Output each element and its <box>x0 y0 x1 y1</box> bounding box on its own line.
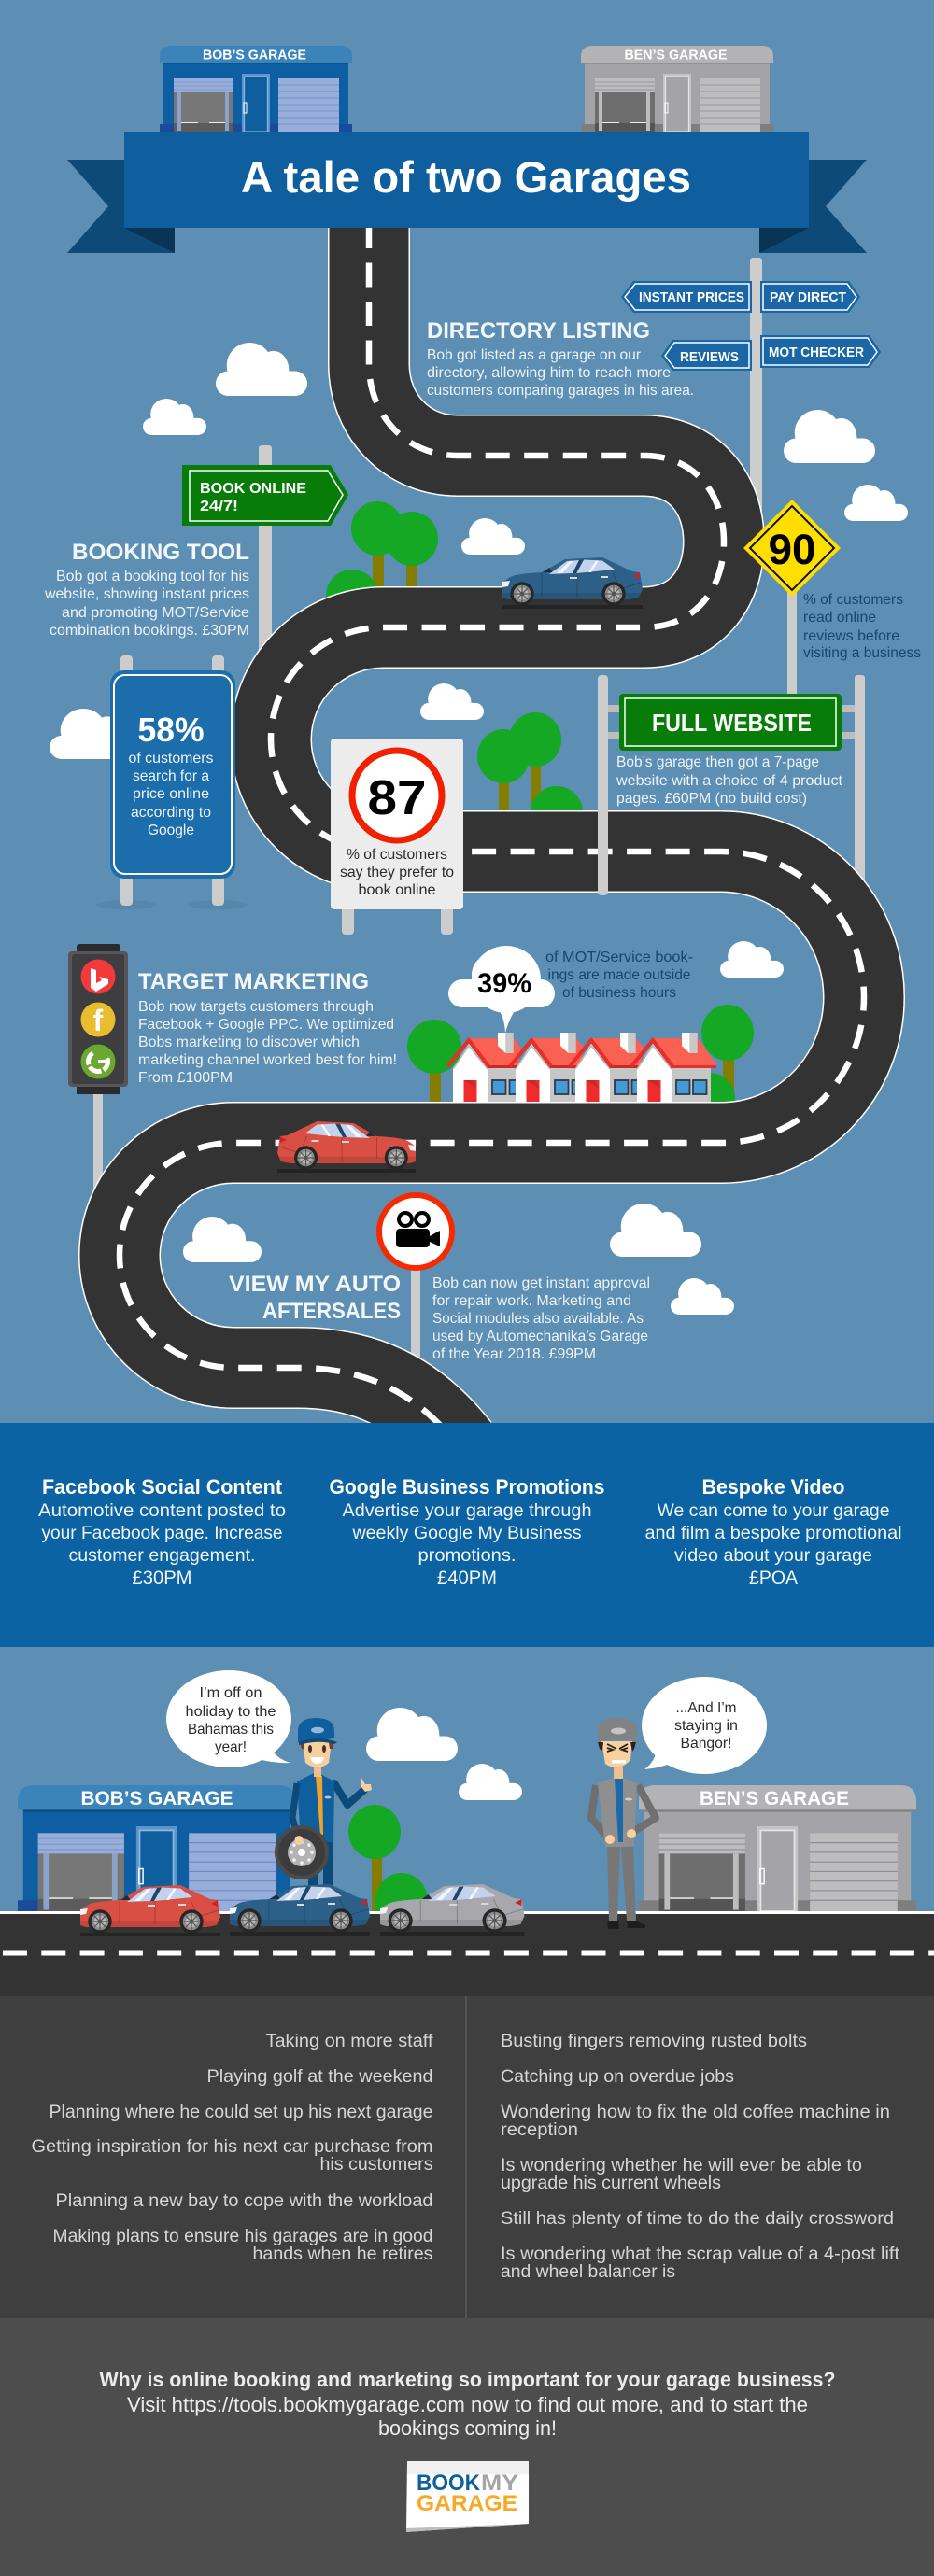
signs: instant prices, pay direct, reviews, MOT checker: REVIEWS <box>680 350 739 365</box>
speech bubble: Bob <box>166 1670 291 1767</box>
speech bubble: Bob: I’m off on <box>200 1685 262 1701</box>
text: reviews stat: reviews before <box>803 628 899 644</box>
speech bubble: Bob: year! <box>215 1739 247 1755</box>
character: Bob mechanic <box>275 1718 372 1890</box>
panel: Google business promotions <box>329 1475 605 1588</box>
text: view my auto aftersales: AFTERSALES <box>262 1299 401 1324</box>
icon: Bob's garage top: BOB’S GARAGE <box>203 49 306 63</box>
text: booking tool: combination bookings. £30PM <box>50 623 249 639</box>
icon: camera <box>396 1213 440 1247</box>
sign: book online: 24/7! <box>200 499 238 514</box>
list: Ben's activities: Wondering how to fix the old coffee machine in <box>501 2103 890 2122</box>
speech bubble: Ben: Bangor! <box>680 1736 732 1752</box>
sign: book online <box>182 465 348 526</box>
list: Ben's activities: Is wondering what the scrap value of a 4-post lift <box>501 2245 900 2264</box>
list: Bob's activities: hands when he retires <box>252 2245 433 2264</box>
text: booking tool: and promoting MOT/Service <box>62 605 249 621</box>
sign: 90 diamond <box>743 500 841 597</box>
Ben's garage large <box>639 1785 916 1911</box>
text: booking tool: BOOKING TOOL <box>72 540 249 565</box>
trees behind the road <box>326 501 754 1123</box>
panel: Google business promotions: weekly Google My Business <box>351 1523 582 1543</box>
speech bubble: Ben: ...And I’m <box>676 1700 736 1716</box>
sign: 87 speed limit: say they prefer to <box>340 865 454 880</box>
panel: bespoke video: video about your garage <box>674 1545 872 1566</box>
list: Ben's activities: Busting fingers removing rusted bolts <box>501 2032 807 2051</box>
text: target marketing: From £100PM <box>138 1070 233 1086</box>
traffic light <box>68 944 128 1094</box>
text: view my auto aftersales: Bob can now get instant approval <box>432 1275 650 1291</box>
red car on road <box>277 1121 416 1173</box>
text: 39% stat: of MOT/Service book- <box>545 950 693 965</box>
panel: bespoke video: We can come to your garage <box>658 1500 889 1521</box>
sign: 58% of customers: of customers <box>129 751 213 767</box>
signs: instant prices, pay direct, reviews, MOT checker: INSTANT PRICES <box>639 290 744 305</box>
list: Bob's activities: Taking on more staff <box>265 2032 433 2051</box>
callout: 39% cloud <box>448 946 555 1033</box>
sign: 90 diamond: 90 <box>768 526 816 573</box>
icon: Bob's garage top <box>160 46 352 132</box>
text: view my auto aftersales: of the Year 2018. £99PM <box>432 1346 596 1362</box>
sign: 58% of customers <box>96 655 248 909</box>
panel: Facebook social content: customer engagement. <box>69 1545 256 1566</box>
title: A tale of two Garages <box>241 152 691 202</box>
list: Ben's activities: Catching up on overdue jobs <box>501 2067 734 2087</box>
panel: Google business promotions: Google Business Promotions <box>329 1475 605 1499</box>
text: target marketing: Bob now targets customers through <box>138 999 374 1015</box>
panel: Google business promotions: Advertise your garage through <box>342 1500 592 1521</box>
sign: 87 speed limit: % of customers <box>347 847 447 863</box>
text: target marketing: TARGET MARKETING <box>138 969 369 994</box>
text: full website: Bob’s garage then got a 7-page <box>616 754 819 770</box>
speech bubble: Bob: holiday to the <box>185 1704 276 1720</box>
panel: Facebook social content <box>38 1475 286 1588</box>
panel: call to action: Visit https://tools.bookmygarage.com now to find out more, and to start the <box>127 2393 808 2416</box>
text: 39% stat: of business hours <box>562 985 676 1001</box>
text: view my auto aftersales: Social modules also available. As <box>432 1311 644 1327</box>
blue car on road <box>502 557 643 609</box>
list: Ben's activities: Is wondering whether he will ever be able to <box>501 2156 862 2175</box>
panel: call to action <box>0 2318 934 2576</box>
list: Ben's activities: reception <box>501 2120 578 2140</box>
panel: Facebook social content: Automotive content posted to <box>38 1500 286 1521</box>
sign: 87 speed limit: book online <box>359 882 436 898</box>
logo: Book My Garage: GARAGE <box>417 2491 517 2516</box>
text: reviews stat: % of customers <box>803 592 903 608</box>
sign: full website <box>598 675 855 895</box>
speech bubble: Ben <box>642 1677 767 1774</box>
sign: full website: FULL WEBSITE <box>652 709 812 737</box>
sign: book online: BOOK ONLINE <box>200 481 306 497</box>
text: view my auto aftersales: for repair work. Marketing and <box>432 1293 631 1309</box>
text: 39% stat <box>545 950 693 1001</box>
sign: 58% of customers: 58% <box>138 711 204 749</box>
panel: Google business promotions: £40PM <box>437 1568 497 1588</box>
character: Ben mechanic <box>591 1718 656 1929</box>
panel: Facebook social content: your Facebook page. Increase <box>41 1523 282 1543</box>
list: Bob's activities: Planning a new bay to cope with the workload <box>56 2191 433 2211</box>
text: directory listing <box>427 318 694 399</box>
list: Bob's activities: Playing golf at the weekend <box>207 2067 433 2087</box>
signs: instant prices, pay direct, reviews, MOT checker: MOT CHECKER <box>769 345 864 360</box>
panel: bespoke video: £POA <box>749 1568 798 1588</box>
icon: Google <box>80 1044 116 1079</box>
logo: Book My Garage: MY <box>481 2470 518 2496</box>
text: full website: pages. £60PM (no build cost) <box>616 791 807 807</box>
icon: Facebook <box>80 1003 116 1037</box>
panel: call to action: bookings coming in! <box>378 2416 557 2440</box>
list: Ben's activities: Still has plenty of time to do the daily crossword <box>501 2209 894 2229</box>
signs: instant prices, pay direct, reviews, MOT checker <box>621 281 881 371</box>
Bob's garage large <box>18 1785 295 1911</box>
panel: call to action: Why is online booking and marketing so important for your garage business? <box>99 2368 835 2391</box>
callout: 39% cloud: 39% <box>477 968 531 999</box>
winding road <box>120 224 864 1447</box>
speech bubble: Ben: staying in <box>674 1718 738 1734</box>
text: reviews stat <box>803 592 921 661</box>
houses row <box>447 1033 716 1103</box>
text: directory listing: Bob got listed as a garage on our <box>427 347 642 363</box>
panel: bespoke video: Bespoke Video <box>702 1475 844 1499</box>
text: target marketing: marketing channel worked best for him! <box>138 1052 397 1068</box>
list: Ben's activities: upgrade his current wheels <box>501 2174 721 2193</box>
icon: Bing <box>80 960 116 993</box>
text: reviews stat: read online <box>803 610 876 626</box>
title banner <box>67 132 867 253</box>
text: view my auto aftersales: VIEW MY AUTO <box>229 1272 401 1297</box>
text: full website: website with a choice of 4 product <box>616 773 843 789</box>
sign: video camera <box>379 1195 452 1268</box>
list: Bob's activities <box>32 2032 433 2264</box>
signs: instant prices, pay direct, reviews, MOT checker: PAY DIRECT <box>770 290 846 305</box>
road: bottom street <box>0 1911 934 1996</box>
sign: 87 speed limit: 87 <box>368 771 426 825</box>
sign: 58% of customers: according to <box>131 805 211 821</box>
posts behind the road <box>93 258 865 1368</box>
text: target marketing <box>138 969 397 1086</box>
text: booking tool: website, showing instant prices <box>44 586 249 602</box>
speech bubble: Bob: Bahamas this <box>188 1722 274 1738</box>
text: booking tool <box>44 540 249 639</box>
text: directory listing: DIRECTORY LISTING <box>427 318 650 344</box>
icon: Facebook: f <box>93 1004 104 1037</box>
panel: Facebook social content: Facebook Social Content <box>42 1475 283 1499</box>
panel: Google business promotions: promotions. <box>418 1545 516 1566</box>
sign: 58% of customers: search for a <box>133 768 209 784</box>
panel: Facebook social content: £30PM <box>133 1568 192 1588</box>
text: target marketing: Bobs marketing to discover which <box>138 1035 360 1050</box>
text: view my auto aftersales: used by Automechanika’s Garage <box>432 1329 648 1344</box>
clouds <box>50 343 908 1800</box>
text: full website <box>616 754 843 807</box>
text: booking tool: Bob got a booking tool for his <box>56 569 249 584</box>
panel: bespoke video: and film a bespoke promotional <box>644 1523 902 1543</box>
list: Bob's activities: Planning where he could set up his next garage <box>49 2103 433 2122</box>
list: Ben's activities: and wheel balancer is <box>501 2262 675 2282</box>
panel: comparison lists <box>0 1996 934 2318</box>
logo: Book My Garage: BOOK <box>417 2470 481 2496</box>
icon: Ben's garage top: BEN’S GARAGE <box>624 49 728 63</box>
text: target marketing: Facebook + Google PPC. We optimized <box>138 1017 394 1033</box>
tree by the cars <box>348 1805 428 1911</box>
list: Ben's activities <box>501 2032 900 2282</box>
panel: bespoke video <box>644 1475 902 1588</box>
sign: 58% of customers: price online <box>133 786 209 802</box>
Bob's garage large: BOB’S GARAGE <box>80 1787 234 1809</box>
text: directory listing: customers comparing garages in his area. <box>427 383 694 399</box>
icon: Ben's garage top <box>581 46 773 132</box>
blue band <box>0 1423 934 1647</box>
list: Bob's activities: Making plans to ensure his garages are in good <box>52 2227 433 2246</box>
sign: 58% of customers: Google <box>148 823 194 838</box>
text: 39% stat: ings are made outside <box>547 967 691 983</box>
list: Bob's activities: his customers <box>319 2155 433 2175</box>
text: view my auto aftersales <box>229 1272 650 1362</box>
list: Bob's activities: Getting inspiration for his next car purchase from <box>32 2137 433 2157</box>
logo: Book My Garage <box>406 2461 529 2532</box>
Ben's garage large: BEN’S GARAGE <box>700 1787 849 1809</box>
cars parked <box>80 1884 525 1936</box>
sign: 87 speed limit <box>331 739 463 935</box>
text: directory listing: directory, allowing him to reach more <box>427 365 671 381</box>
text: reviews stat: visiting a business <box>803 645 921 661</box>
